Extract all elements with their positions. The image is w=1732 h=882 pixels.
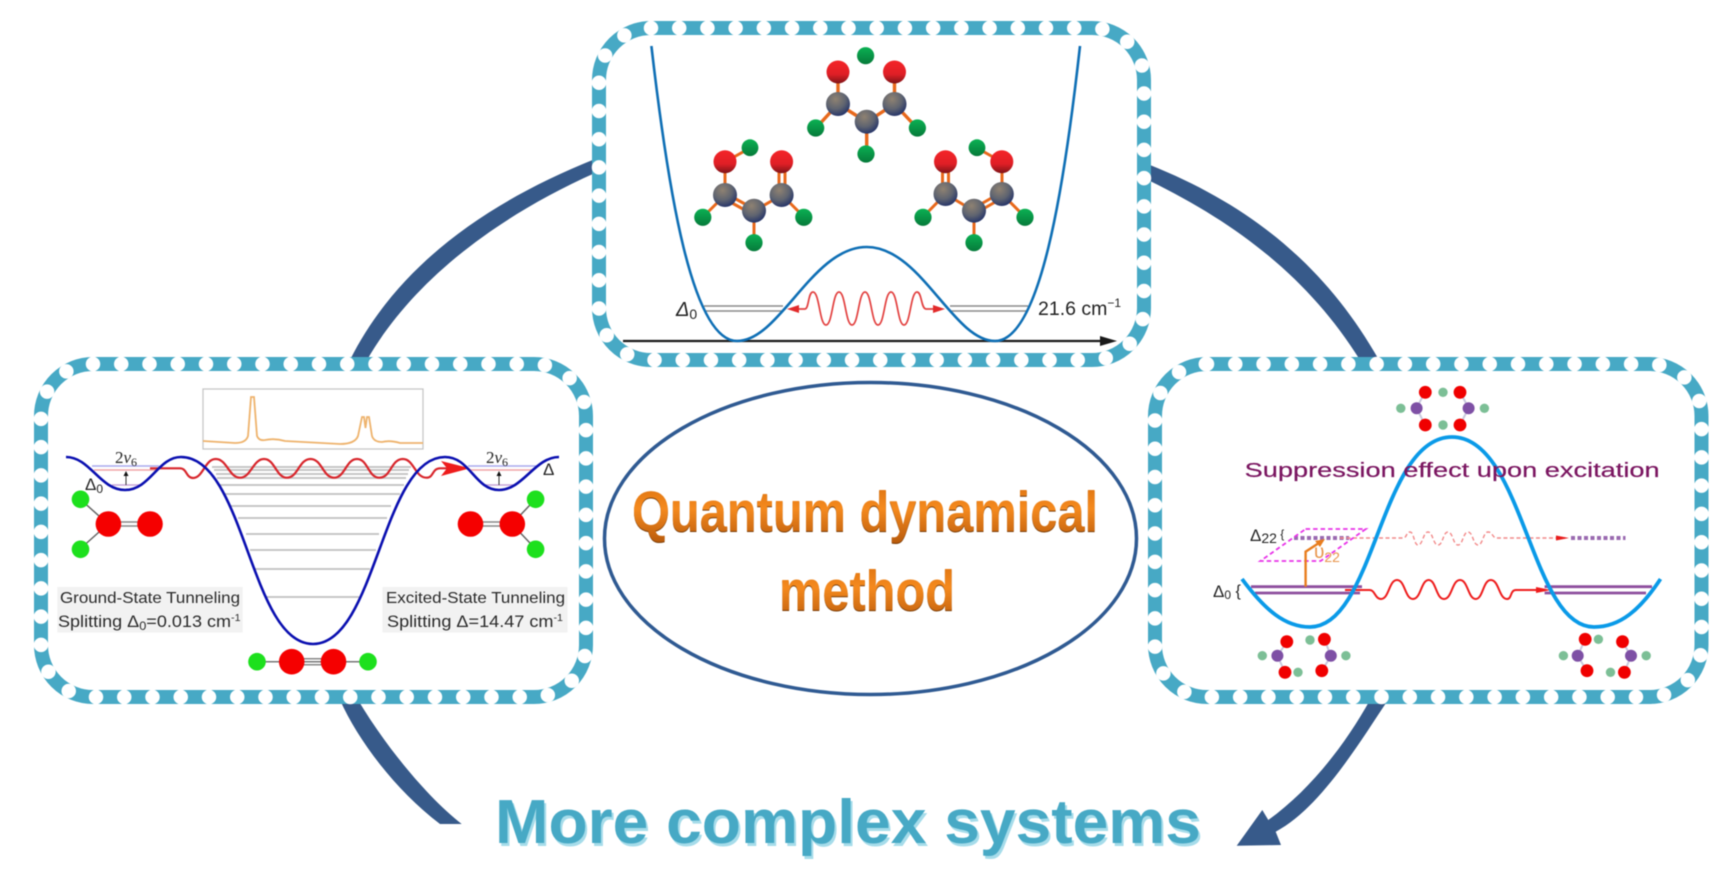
molecule: centre [807,47,926,163]
potential curve [66,457,559,644]
heading: quantum dynamical method [632,480,1098,623]
arrow: left panel to more complex systems [340,700,462,824]
molecule: bottom right [1559,633,1651,679]
label: delta 22: { [1277,527,1284,541]
energy level lines [704,306,1028,311]
excited levels [1294,536,1626,540]
text block: ground-state splitting: -1 [231,613,241,624]
x axis arrow [623,336,1117,346]
text block: excited-state splitting: Excited-State Tunneling [386,590,565,607]
potential curve [1242,437,1660,627]
panel: top double-well potential [599,28,1144,360]
text block: ground-state splitting: Ground-State Tunneling [60,590,240,607]
heading: quantum dynamical method: Quantum dynamical [632,480,1098,544]
label: delta: Δ [543,460,554,479]
label: delta 0: { [1231,583,1241,600]
label: 2 nu 6 left: 2ν [115,448,131,467]
molecule: top [1396,386,1489,431]
text block: excited-state splitting [382,587,568,632]
ground levels [1251,587,1652,593]
label: delta zero: Δ [676,299,689,321]
label: delta zero: 0 [689,306,697,322]
label: delta 0: 0 [1224,588,1231,602]
text block: ground-state splitting: 0 [139,619,147,633]
excitation arrows [124,471,502,485]
molecule: right [458,490,544,558]
molecule: left [72,490,163,558]
label: 2 nu 6 right: 2ν [486,448,502,467]
molecule: left [694,139,812,251]
energy level ladder [212,467,411,597]
tunneling wave [787,292,945,325]
text block: ground-state splitting: =0.013 cm [146,612,231,631]
label: 2 nu 6 left: 6 [131,455,137,469]
panel: right suppression effect [1155,364,1702,697]
spectrum inset [203,389,423,449]
selected mode box [1260,529,1366,561]
heading: suppression effect: Suppression effect upon excitation [1245,460,1660,482]
heading: more complex systems: More complex systems [495,788,1201,857]
tunneling wave [150,459,470,478]
arrow: top panel to right panel [1150,165,1379,360]
tunneling wave [1345,580,1551,599]
molecule: bottom left [1258,633,1351,679]
label: delta zero: 0 [96,482,103,496]
excited tunneling wave [1340,532,1565,545]
panel frame [41,364,586,697]
label: 2 nu 6 right: 6 [502,455,508,469]
text block: ground-state splitting: Splitting Δ [58,612,135,631]
well levels [92,466,536,485]
panel frame [599,28,1144,360]
label: 21.6 cm-1: 21.6 cm [1038,298,1107,320]
label: delta zero: Δ [85,475,96,494]
arrow: right panel to more complex systems [1237,700,1388,846]
label: nu 22: υ [1314,542,1324,563]
excitation arrow [1306,539,1325,587]
text block: excited-state splitting: -1 [554,613,563,624]
label: 21.6 cm-1: −1 [1107,296,1121,310]
label: delta 22: Δ [1250,526,1261,545]
text block: excited-state splitting: Splitting Δ=14.47 cm [387,612,543,631]
small red arrow [1556,536,1569,540]
molecule: right [914,139,1034,251]
label: delta 0: Δ [1213,582,1224,601]
heading: quantum dynamical method: method [779,559,955,623]
centre ellipse [604,382,1136,694]
label: nu 22: 22 [1324,549,1340,565]
label: delta 22: 22 [1261,530,1277,546]
text block: ground-state splitting [57,587,243,633]
panel: left ground and excited state tunneling [41,364,586,697]
potential curve [651,46,1080,341]
molecule: bottom [248,649,377,674]
arrow: left panel to top panel [350,159,595,360]
panel frame [1155,364,1702,697]
